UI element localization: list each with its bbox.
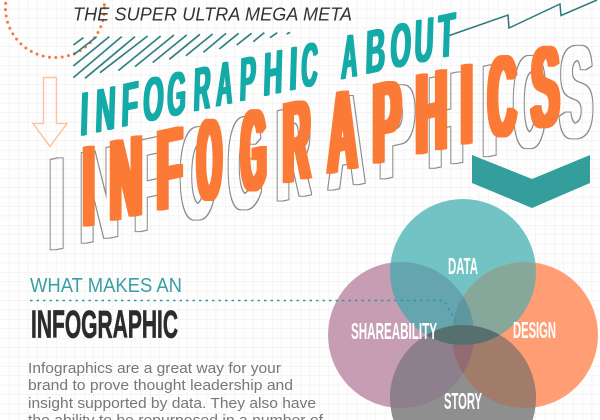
teal title: N <box>95 73 117 147</box>
outline title: G <box>229 86 262 240</box>
icon: down arrow <box>33 78 67 146</box>
dotted leader line <box>30 300 458 325</box>
orange title: I <box>461 38 473 171</box>
orange title <box>83 20 559 253</box>
outline title: O <box>181 97 216 250</box>
circle: design <box>452 262 598 408</box>
outline title: A <box>329 65 364 218</box>
teal title: A <box>341 19 359 93</box>
teal title: U <box>414 4 435 78</box>
orange title: H <box>416 43 447 180</box>
body paragraph <box>28 360 324 420</box>
teal title: H <box>263 37 284 111</box>
teal title: O <box>390 9 412 83</box>
orange title: A <box>328 64 357 199</box>
outline title: N <box>80 119 119 272</box>
orange title: N <box>110 109 142 246</box>
outline title: F <box>134 108 164 260</box>
section heading: INFOGRAPHIC <box>31 304 178 346</box>
teal title <box>80 0 456 150</box>
outline title: R <box>277 76 310 229</box>
label: shareability: SHAREABILITY <box>351 318 437 344</box>
teal title: A <box>216 46 234 120</box>
venn diagram: DATA <box>448 253 478 279</box>
outline title: P <box>379 55 414 208</box>
circle: story <box>390 325 536 420</box>
teal title: F <box>121 68 139 142</box>
venn diagram <box>328 199 598 420</box>
teal title: O <box>142 62 165 137</box>
orange title: R <box>283 74 310 209</box>
outline title <box>49 16 592 279</box>
outline title: H <box>428 43 464 196</box>
teal title: R <box>193 53 212 126</box>
circle: data <box>390 199 536 345</box>
venn diagram: STORY <box>444 388 482 414</box>
orange title: C <box>488 30 516 165</box>
teal title: G <box>166 58 187 132</box>
dotted orange circle <box>6 0 104 58</box>
teal title: P <box>239 43 257 116</box>
chevron <box>472 155 590 208</box>
outline title: I <box>482 37 497 186</box>
orange title: I <box>83 120 95 253</box>
orange title: F <box>157 102 182 236</box>
body paragraph: brand to prove thought leadership and <box>28 377 293 394</box>
orange title: P <box>373 54 401 190</box>
hatch pattern <box>73 32 290 78</box>
outline title: C <box>514 27 544 178</box>
orange title: O <box>198 93 221 228</box>
teal title: I <box>289 34 298 105</box>
teal title: I <box>80 79 89 150</box>
kicker heading: THE SUPER ULTRA MEGA META <box>73 4 352 24</box>
subheading: WHAT MAKES AN <box>30 275 182 297</box>
teal title: B <box>365 15 386 89</box>
zigzag line <box>448 0 597 36</box>
orange title: G <box>241 84 266 219</box>
venn diagram: DESIGN <box>513 317 556 343</box>
body paragraph: insight supported by data. They also have <box>28 395 316 412</box>
outline title: S <box>560 16 592 168</box>
teal title: T <box>437 0 456 73</box>
teal title: C <box>301 28 319 102</box>
outline title: I <box>49 130 64 279</box>
body paragraph: Infographics are a great way for your <box>28 360 281 377</box>
orange title: S <box>532 20 559 155</box>
circle: shareability <box>328 262 474 408</box>
